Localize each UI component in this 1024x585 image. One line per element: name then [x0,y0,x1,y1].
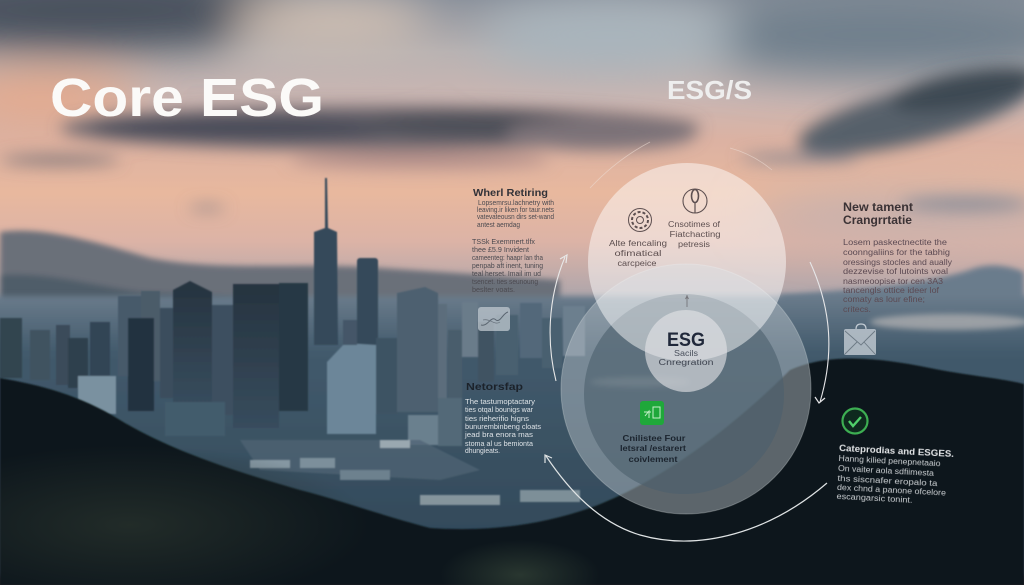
core circle label: Cnregration [658,358,714,367]
arrow: left arc up [550,255,567,381]
text block: New tament Crangrrtatie: coonngaliins for the tabhig [843,248,950,257]
text block: Netorsfap: ties rieherifio higns [465,414,529,423]
text block: New tament Crangrrtatie: nasmeoopise tor cen 3A3 [843,277,944,286]
core circle label: ESG [667,330,705,351]
text block: Wherl Retiring: TSSk Exemmert.tlfx [472,237,535,246]
arrow: right arc down [810,262,829,403]
label: Cnilistee Four: coivlement [628,454,678,464]
text block: Wherl Retiring: vatevateousn dirs set-wand [477,212,554,221]
label: Cnsotimes of [668,220,721,249]
text block: Cateprodias and ESGES [836,443,954,507]
text block: Netorsfap: ties otqal bounigs war [465,405,534,414]
text block: Cateprodias and ESGES: escangarsic tonint. [836,492,913,505]
subtitle: ESG/S [667,75,752,105]
text block: Wherl Retiring: teal herset. Imail im ud [472,269,541,278]
label: Alte fencaling [609,239,667,268]
diagram: overlapping ESG circles [561,163,811,514]
text block: Netorsfap: bunurembinbeng cloats [465,422,541,431]
text block: Cateprodias and ESGES: On vaiter aola sdfiimesta [838,464,935,478]
label: Cnsotimes of: Fiatchacting [670,230,720,239]
text block: New tament Crangrrtatie: comaty as lour efine; [843,295,925,304]
label: Alte fencaling: ofimatical [614,249,662,258]
text block: Netorsfap: jead bra enora mas [464,430,533,439]
arrow: small vertical connector [686,295,688,307]
label: Cnilistee Four: letsral /estarert [620,443,686,453]
icon: envelope briefcase [844,324,876,355]
core circle [645,310,727,392]
label: Cnsotimes of: petresis [678,240,710,249]
text block: New tament Crangrrtatie: oressings stocles and aually [843,258,952,267]
text block: New tament Crangrrtatie: Crangrrtatie [843,215,912,227]
text block: Cateprodias and ESGES: dex chnd a panone ofcelore [837,483,947,498]
icon: green square badge [640,401,664,425]
text block: Wherl Retiring: cameenteg: haapr lan tha [472,253,544,262]
arrow: faint top arcs [590,142,772,188]
icon: gear badge [628,208,652,232]
text block: Wherl Retiring: leaving.ir liken for taur.nets [477,205,554,214]
label: Cnilistee Four [620,433,686,464]
label: Alte fencaling: Alte fencaling [609,239,667,248]
text block: New tament Crangrrtatie: critecs. [843,305,871,314]
text block: Wherl Retiring: thee £5.9 Invident [472,245,529,254]
text block: Wherl Retiring: antest aemdag [477,220,520,229]
upper environment circle [588,163,786,361]
icon: whisk badge [683,189,707,213]
background: distant mountains [0,231,1024,345]
background: sunset sky [0,0,1024,345]
text block: Wherl Retiring: beslter voats. [472,285,515,294]
text block: Netorsfap: stoma al us bemionta [465,439,533,448]
title: Core ESG [50,68,324,128]
text block: Wherl Retiring: Wherl Retiring [473,187,548,199]
label: Cnilistee Four: Cnilistee Four [622,433,686,443]
inner ring circle [584,294,784,494]
text block: Cateprodias and ESGES: Cateprodias and ESGES. [839,443,954,460]
text block: Netorsfap: Netorsfap [466,381,523,393]
text block: Cateprodias and ESGES: Hanng kilied penepnetaaio [838,454,941,468]
text block: New tament Crangrrtatie: dezzevise tof lutoints voal [843,267,948,276]
text block: New tament Crangrrtatie: New tament [843,202,913,214]
text block: Cateprodias and ESGES: ths siscnafer eropalo ta [837,474,938,488]
icon: green check badge [842,408,868,434]
text block: Wherl Retiring: Lopsemrsu.lachnetry with [478,198,554,207]
text block: Netorsfap: The tastumoptactary [465,397,535,406]
background: city haze [0,296,1024,576]
large outer circle [561,264,811,514]
text block: Netorsfap: dhungieats. [465,446,500,455]
text block: Wherl Retiring [472,187,554,294]
core circle label [658,330,714,367]
text block: New tament Crangrrtatie: tancengls ottice ideer lof [843,286,940,295]
core circle label: Sacils [674,349,698,358]
arrow: bottom sweep [545,455,827,541]
label: Cnsotimes of: Cnsotimes of [668,220,721,229]
text block: New tament Crangrrtatie: Losem paskectnectite the [843,238,948,247]
text block: Wherl Retiring: tsencet. ties seunoung [472,277,538,286]
text block: Wherl Retiring: penpab aft inent, tuning [472,261,543,270]
background: skyline buildings [0,178,585,480]
icon: line chart card [478,307,510,331]
text block: Netorsfap [464,381,541,455]
label: Alte fencaling: carcpeice [618,259,657,268]
text block: New tament Crangrrtatie [843,202,952,314]
background: dark forested hills [0,358,1024,585]
